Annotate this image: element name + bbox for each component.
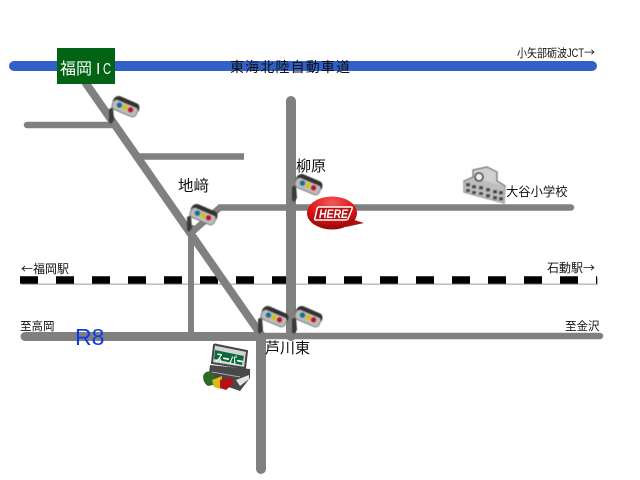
label: Isurugi station: 石動駅→	[547, 259, 595, 276]
label: Ashikawa-higashi: 芦川東	[265, 340, 310, 357]
icon: traffic signal crossing right	[292, 304, 324, 334]
highway sign: Fukuoka IC: 福岡	[60, 60, 92, 78]
label: JCT direction: JCT	[567, 46, 585, 60]
label: JCT direction	[517, 44, 595, 60]
label: Yanagihara: 柳原	[296, 158, 326, 175]
icon: supermarket: スーパー	[214, 351, 244, 369]
icon: traffic signal top-left	[109, 94, 141, 124]
label: JCT direction: →	[584, 44, 595, 60]
icon: HERE callout: HERE	[319, 209, 348, 221]
label: Route 8: R8	[75, 324, 104, 350]
label: to Takaoka: 至高岡	[20, 320, 54, 333]
highway sign: Fukuoka IC: I	[96, 61, 100, 78]
icon: supermarket	[203, 344, 250, 391]
label: JCT direction: 小矢部砺波	[517, 46, 567, 60]
label: Fukuoka station: ←福岡駅	[21, 260, 69, 277]
label: Jizaki: 地﨑	[178, 177, 209, 195]
roads	[25, 82, 600, 469]
icon: traffic signal Jizaki	[187, 202, 219, 232]
road: expressway	[9, 61, 597, 71]
railway	[20, 276, 598, 285]
highway sign: Fukuoka IC: C	[103, 61, 111, 78]
icon: traffic signal crossing left	[258, 304, 290, 334]
label: expressway name: 東海北陸自動車道	[230, 59, 350, 75]
icon: traffic signal Yanagihara	[292, 172, 324, 202]
icon: school	[464, 167, 505, 203]
highway sign: Fukuoka IC	[57, 48, 115, 84]
icon: HERE callout	[307, 196, 364, 230]
label: school: 大谷小学校	[506, 184, 568, 199]
label: to Kanazawa: 至金沢	[565, 319, 600, 333]
